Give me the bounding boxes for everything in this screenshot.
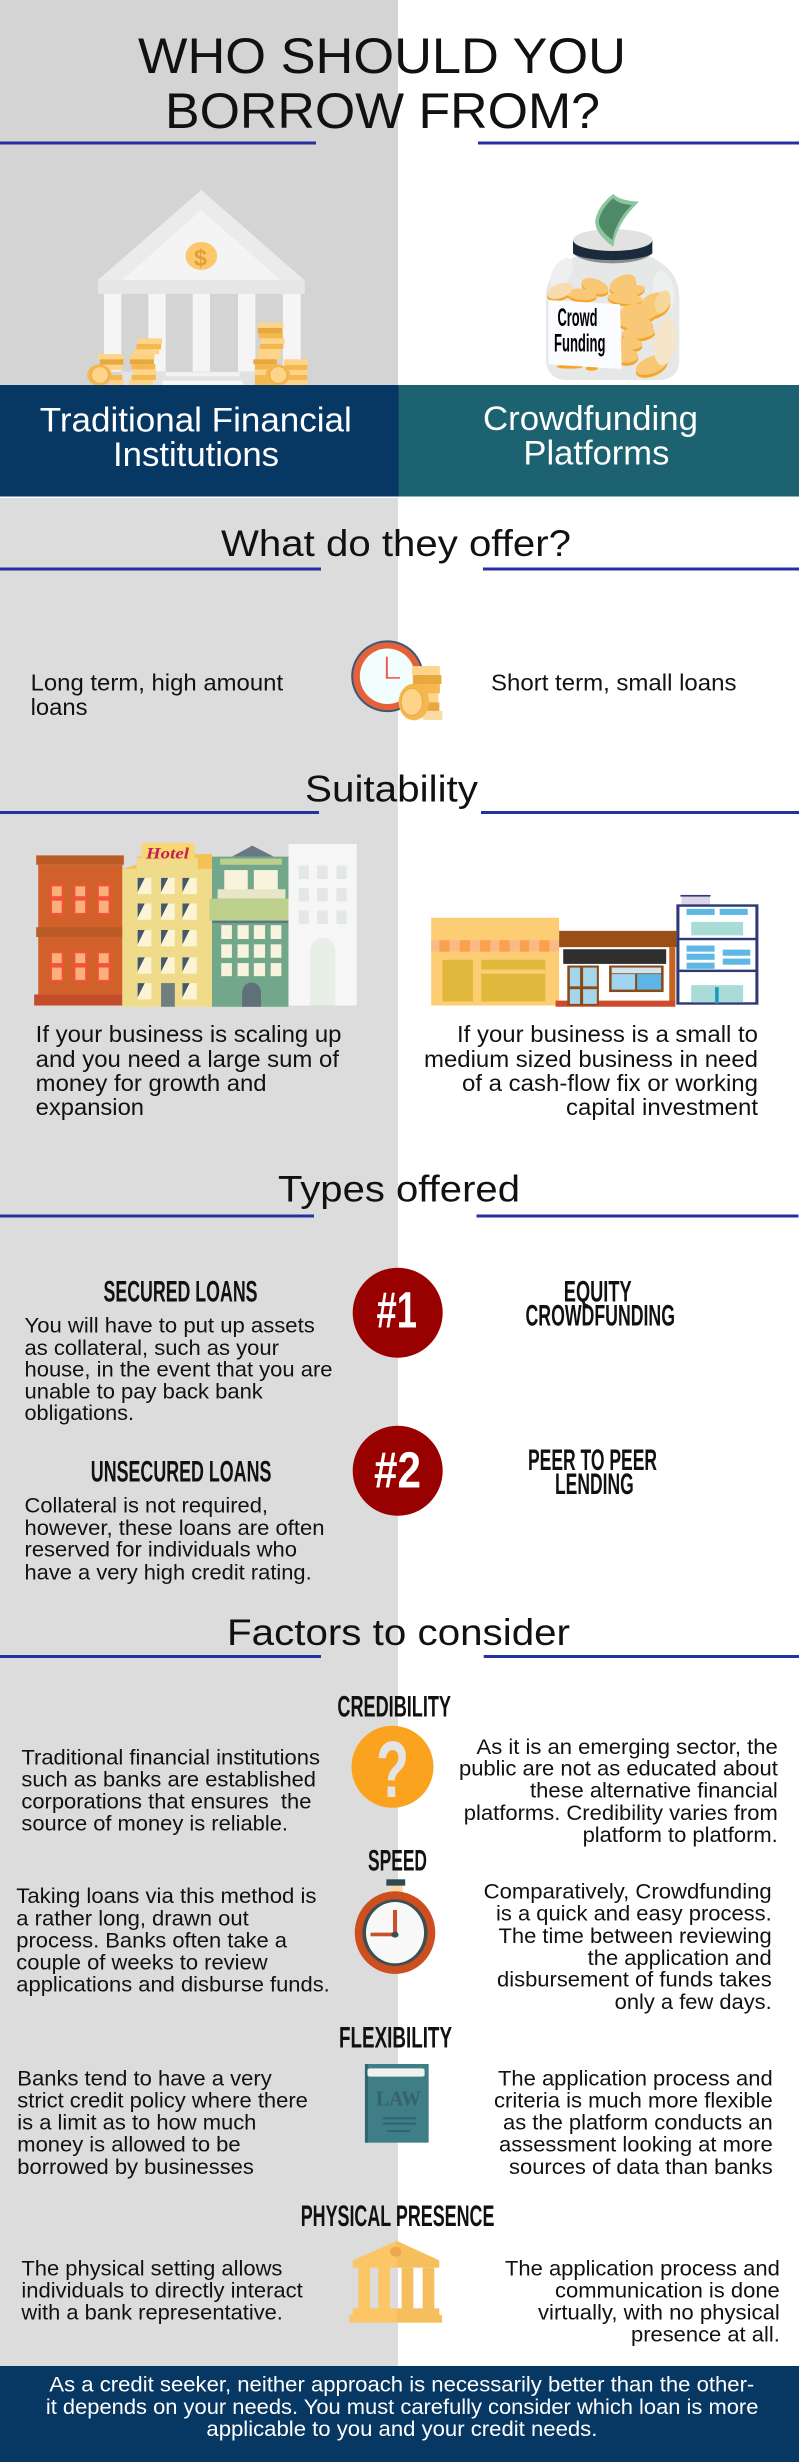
text: speed banks bbox=[16, 1884, 330, 1997]
footer conclusion bbox=[0, 2366, 799, 2462]
text: speed banks: Taking loans via this method is bbox=[16, 1884, 317, 1908]
text: flexibility banks: money is allowed to be bbox=[17, 2133, 241, 2157]
text: long term bbox=[31, 670, 284, 720]
secured loans bbox=[24, 1276, 332, 1425]
text: credibility banks: Traditional financial institutions bbox=[21, 1746, 320, 1770]
text: physical banks: The physical setting allows bbox=[21, 2257, 282, 2281]
factor heading: credibility: CREDIBILITY bbox=[337, 1691, 451, 1724]
title bbox=[138, 28, 626, 139]
text: scaling up: money for growth and bbox=[36, 1070, 267, 1096]
text: credibility crowdfunding bbox=[459, 1735, 778, 1847]
text: physical banks: individuals to directly interact bbox=[21, 2279, 303, 2303]
text: short term: Short term, small loans bbox=[491, 670, 736, 696]
text: flexibility banks: borrowed by businesses bbox=[17, 2155, 254, 2179]
illustration: large buildings bbox=[34, 843, 357, 1007]
footer conclusion: it depends on your needs. You must carefully consider which loan is more bbox=[46, 2395, 758, 2419]
text: scaling up bbox=[36, 1021, 341, 1120]
unsecured loans: however, these loans are often bbox=[24, 1516, 324, 1540]
text: credibility crowdfunding: platforms. Credibility varies from bbox=[464, 1801, 778, 1825]
text: physical crowdfunding: presence at all. bbox=[631, 2323, 780, 2347]
factor heading: flexibility: FLEXIBILITY bbox=[339, 2021, 452, 2054]
text: scaling up: and you need a large sum of bbox=[36, 1046, 340, 1072]
illustration: small businesses bbox=[431, 895, 758, 1007]
text: physical crowdfunding: communication is done bbox=[555, 2279, 780, 2303]
text: flexibility banks bbox=[17, 2067, 308, 2179]
text: credibility crowdfunding: these alternative financial bbox=[530, 1779, 778, 1803]
secured loans: You will have to put up assets bbox=[24, 1314, 315, 1338]
icon: question mark bbox=[352, 1725, 434, 1814]
peer to peer lending bbox=[528, 1444, 657, 1501]
secured loans: house, in the event that you are bbox=[24, 1358, 332, 1382]
equity crowdfunding: CROWDFUNDING bbox=[526, 1300, 675, 1333]
text: flexibility banks: Banks tend to have a very bbox=[17, 2067, 272, 2091]
text: long term: loans bbox=[31, 694, 88, 720]
text: credibility banks bbox=[21, 1746, 320, 1836]
text: flexibility crowdfunding: sources of data than banks bbox=[509, 2155, 773, 2179]
title: WHO SHOULD YOU bbox=[138, 28, 626, 84]
text: physical banks: with a bank representative. bbox=[20, 2301, 283, 2325]
footer conclusion: As a credit seeker, neither approach is necessarily better than the other- bbox=[49, 2373, 754, 2397]
text: speed crowdfunding: The time between reviewing bbox=[498, 1924, 772, 1948]
header band: crowdfunding platforms bbox=[398, 385, 799, 496]
jar label: Funding bbox=[554, 330, 606, 358]
text: physical crowdfunding bbox=[505, 2257, 780, 2347]
header band: traditional financial institutions: Institutions bbox=[113, 436, 279, 474]
text: speed crowdfunding: only a few days. bbox=[615, 1990, 772, 2014]
hotel sign: Hotel bbox=[145, 846, 190, 862]
icon: bank building bbox=[87, 190, 308, 386]
icon: crowdfunding jar bbox=[545, 194, 679, 382]
text: speed crowdfunding: the application and bbox=[588, 1946, 772, 1970]
text: speed crowdfunding bbox=[484, 1880, 772, 2014]
badge: number one: #1 bbox=[376, 1282, 417, 1339]
text: scaling up: expansion bbox=[36, 1094, 144, 1120]
text: flexibility crowdfunding: criteria is much more flexible bbox=[494, 2089, 773, 2113]
secured loans: obligations. bbox=[24, 1401, 134, 1425]
text: speed banks: process. Banks often take a bbox=[16, 1929, 287, 1953]
header band: traditional financial institutions bbox=[0, 385, 398, 496]
text: credibility crowdfunding: platform to platform. bbox=[583, 1823, 778, 1847]
header band: crowdfunding platforms: Crowdfunding bbox=[483, 400, 698, 438]
peer to peer lending: PEER TO PEER bbox=[528, 1444, 657, 1477]
heading: types offered: Types offered bbox=[278, 1168, 520, 1210]
equity crowdfunding: EQUITY bbox=[564, 1276, 632, 1309]
equity crowdfunding bbox=[526, 1276, 675, 1333]
badge: number one bbox=[353, 1268, 443, 1358]
icon: law book bbox=[365, 2064, 429, 2143]
text: credibility crowdfunding: public are not as educated about bbox=[459, 1757, 778, 1781]
text: credibility banks: such as banks are established bbox=[21, 1768, 316, 1792]
text: flexibility crowdfunding: as the platform conducts an bbox=[503, 2111, 773, 2135]
jar label: Crowd bbox=[558, 304, 598, 332]
unsecured loans: Collateral is not required, bbox=[24, 1494, 268, 1518]
icon: dollar sign on bank: $ bbox=[194, 245, 207, 271]
text: small to medium: If your business is a small to bbox=[457, 1021, 758, 1047]
badge: number two: #2 bbox=[374, 1442, 421, 1499]
text: flexibility banks: strict credit policy where there bbox=[17, 2089, 308, 2113]
icon: law book: LAW bbox=[376, 2086, 421, 2110]
text: speed banks: a rather long, drawn out bbox=[16, 1907, 249, 1931]
text: speed banks: applications and disburse funds. bbox=[16, 1973, 330, 1997]
jar label bbox=[554, 304, 606, 358]
header band: crowdfunding platforms: Platforms bbox=[523, 434, 669, 472]
icon: clock and coins bbox=[351, 640, 442, 720]
text: credibility banks: source of money is reliable. bbox=[21, 1812, 288, 1836]
secured loans: as collateral, such as your bbox=[24, 1336, 279, 1360]
heading: suitability: Suitability bbox=[305, 768, 479, 810]
badge: number two bbox=[353, 1426, 443, 1516]
text: scaling up: If your business is scaling up bbox=[36, 1021, 341, 1047]
icon: stopwatch bbox=[355, 1879, 435, 1974]
text: credibility banks: corporations that ensures the bbox=[21, 1790, 311, 1814]
unsecured loans bbox=[24, 1456, 324, 1584]
peer to peer lending: LENDING bbox=[555, 1468, 634, 1501]
heading: what do they offer: What do they offer? bbox=[221, 523, 571, 564]
text: physical crowdfunding: virtually, with no physical bbox=[538, 2301, 780, 2325]
text: small to medium: of a cash-flow fix or working bbox=[462, 1070, 758, 1096]
text: flexibility crowdfunding bbox=[494, 2067, 773, 2179]
text: flexibility crowdfunding: assessment looking at more bbox=[499, 2133, 773, 2157]
text: long term: Long term, high amount bbox=[31, 670, 284, 696]
text: physical crowdfunding: The application process and bbox=[505, 2257, 780, 2281]
icon: small bank bbox=[349, 2241, 442, 2323]
icon: question mark: ? bbox=[376, 1725, 409, 1814]
text: speed crowdfunding: is a quick and easy process. bbox=[496, 1902, 772, 1926]
text: speed crowdfunding: disbursement of funds takes bbox=[497, 1968, 772, 1992]
unsecured loans: UNSECURED LOANS bbox=[91, 1456, 271, 1489]
text: speed crowdfunding: Comparatively, Crowdfunding bbox=[484, 1880, 772, 1904]
header band: traditional financial institutions: Traditional Financial bbox=[40, 402, 352, 440]
footer conclusion: applicable to you and your credit needs. bbox=[206, 2417, 597, 2441]
secured loans: SECURED LOANS bbox=[104, 1276, 258, 1309]
text: small to medium: capital investment bbox=[566, 1094, 759, 1120]
text: flexibility banks: is a limit as to how much bbox=[17, 2111, 256, 2135]
secured loans: unable to pay back bank bbox=[24, 1379, 263, 1403]
text: credibility crowdfunding: As it is an emerging sector, the bbox=[476, 1735, 778, 1759]
text: flexibility crowdfunding: The application process and bbox=[498, 2067, 773, 2091]
unsecured loans: reserved for individuals who bbox=[24, 1538, 297, 1562]
factor heading: physical presence: PHYSICAL PRESENCE bbox=[301, 2200, 494, 2233]
title: BORROW FROM? bbox=[165, 83, 600, 139]
text: small to medium bbox=[424, 1021, 759, 1120]
heading: factors to consider: Factors to consider bbox=[227, 1612, 570, 1653]
unsecured loans: have a very high credit rating. bbox=[24, 1560, 312, 1584]
text: small to medium: medium sized business in need bbox=[424, 1046, 758, 1072]
text: physical banks bbox=[20, 2257, 303, 2325]
factor heading: speed: SPEED bbox=[368, 1845, 427, 1878]
text: speed banks: couple of weeks to review bbox=[16, 1951, 268, 1975]
